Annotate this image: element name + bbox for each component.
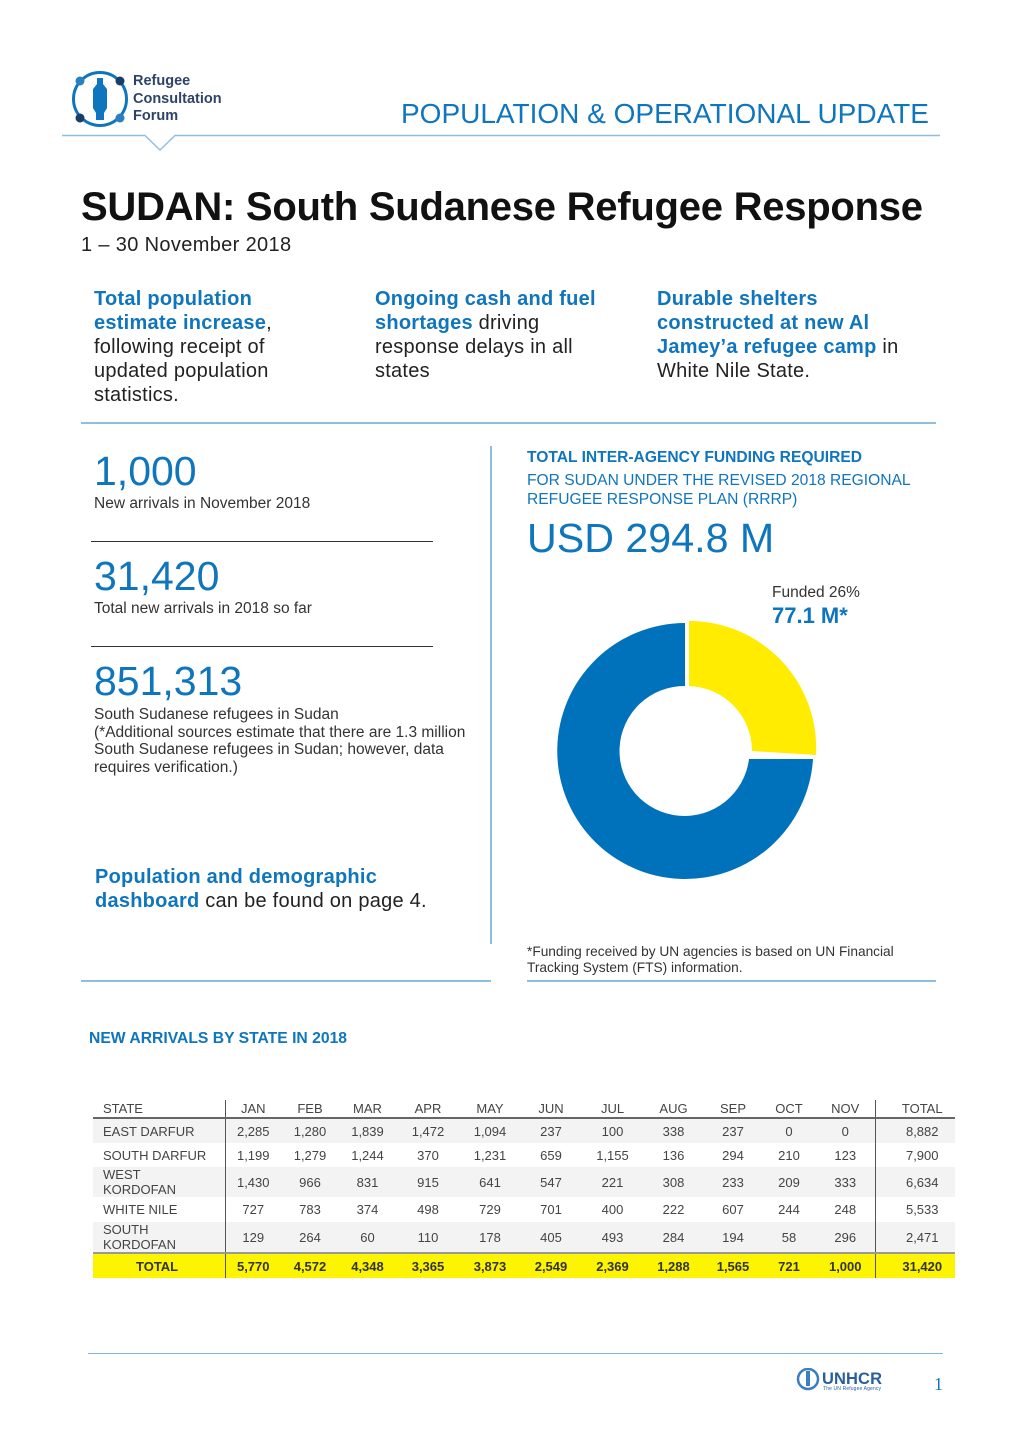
header title: POPULATION & OPERATIONAL UPDATE xyxy=(401,98,929,129)
table: new arrivals by state: 1,199 xyxy=(237,1148,270,1162)
table: new arrivals by state: 727 xyxy=(242,1202,264,1217)
table: new arrivals by state: MAY xyxy=(476,1101,504,1116)
table: new arrivals by state: 1,244 xyxy=(351,1148,384,1162)
table: new arrivals by state: 129 xyxy=(242,1230,264,1244)
funding heading xyxy=(527,449,911,508)
table: new arrivals by state: KORDOFAN xyxy=(103,1182,176,1197)
table: new arrivals by state: KORDOFAN xyxy=(103,1237,176,1252)
funding heading: REFUGEE RESPONSE PLAN (RRRP) xyxy=(527,491,797,508)
table: new arrivals by state: 3,873 xyxy=(474,1258,506,1274)
table: new arrivals by state: 2,549 xyxy=(535,1258,567,1274)
table: new arrivals by state: 2,471 xyxy=(906,1230,939,1244)
highlight 1 xyxy=(94,288,272,406)
table: new arrivals by state: 8,882 xyxy=(906,1124,939,1138)
table heading: NEW ARRIVALS BY STATE IN 2018 xyxy=(89,1030,347,1047)
table: new arrivals by state: SEP xyxy=(720,1101,746,1116)
table: new arrivals by state: 194 xyxy=(722,1230,744,1244)
highlight 1: estimate increase, xyxy=(94,312,272,334)
table: new arrivals by state: 0 xyxy=(842,1124,849,1138)
table: new arrivals by state: 1,279 xyxy=(294,1148,326,1162)
table: new arrivals by state: 221 xyxy=(602,1174,623,1190)
table: new arrivals by state: APR xyxy=(415,1101,441,1116)
UNHCR logo xyxy=(796,1368,882,1392)
table: new arrivals by state: 374 xyxy=(357,1202,378,1217)
table: new arrivals by state: 248 xyxy=(834,1202,856,1217)
table: new arrivals by state: 659 xyxy=(540,1148,562,1162)
highlight 1: following receipt of xyxy=(94,336,265,358)
funding footnote: Tracking System (FTS) information. xyxy=(527,960,742,975)
table: new arrivals by state: 264 xyxy=(299,1230,321,1244)
stat: new arrivals xyxy=(94,448,310,512)
table: new arrivals by state: 5,770 xyxy=(237,1258,270,1274)
dashboard note xyxy=(95,866,427,912)
table: new arrivals by state: 783 xyxy=(299,1202,321,1217)
highlight 2: shortages driving xyxy=(375,312,539,334)
stat: refugees in Sudan xyxy=(94,658,465,776)
highlight 1: statistics. xyxy=(94,384,179,406)
funded label xyxy=(772,584,860,628)
UNHCR logo: The UN Refugee Agency xyxy=(823,1386,882,1392)
footer rule xyxy=(88,1353,943,1354)
stat: refugees in Sudan: South Sudanese refugees in Sudan; however, data xyxy=(94,741,444,758)
table: new arrivals by state: 1,094 xyxy=(474,1124,506,1138)
table: new arrivals by state: 100 xyxy=(602,1124,623,1138)
highlight 2 xyxy=(375,288,596,382)
table: new arrivals by state: 405 xyxy=(540,1230,562,1244)
dashboard note: Population and demographic xyxy=(95,866,377,888)
table: new arrivals by state: 1,472 xyxy=(412,1124,444,1138)
highlight 2: states xyxy=(375,360,430,382)
funding footnote: *Funding received by UN agencies is based on UN Financial xyxy=(527,944,894,959)
funded slice xyxy=(689,621,816,755)
funding amount: USD 294.8 M xyxy=(527,515,774,561)
main title: SUDAN: South Sudanese Refugee Response xyxy=(81,185,923,229)
dashboard note: dashboard can be found on page 4. xyxy=(95,890,427,912)
table: new arrivals by state: 284 xyxy=(663,1230,684,1244)
table: new arrivals by state: 831 xyxy=(357,1174,378,1190)
funding heading: FOR SUDAN UNDER THE REVISED 2018 REGIONAL xyxy=(527,472,911,489)
table: new arrivals by state: 547 xyxy=(540,1174,562,1190)
table: new arrivals by state: JUN xyxy=(538,1101,564,1116)
table: new arrivals by state: 178 xyxy=(479,1230,501,1244)
table: new arrivals by state: AUG xyxy=(659,1101,688,1116)
highlight 3: constructed at new Al xyxy=(657,312,869,334)
funded label: 77.1 M* xyxy=(772,603,848,628)
UNHCR logo: UNHCR xyxy=(822,1370,882,1388)
table: new arrivals by state: 7,900 xyxy=(906,1148,939,1162)
table: new arrivals by state: 370 xyxy=(417,1148,439,1162)
table: new arrivals by state xyxy=(93,1100,955,1278)
table: new arrivals by state: MAR xyxy=(353,1101,382,1116)
table: new arrivals by state: TOTAL xyxy=(136,1258,178,1274)
bottom rules xyxy=(81,980,491,982)
funding heading: TOTAL INTER-AGENCY FUNDING REQUIRED xyxy=(527,449,862,466)
table: new arrivals by state: JUL xyxy=(601,1101,624,1116)
table: new arrivals by state: 2,285 xyxy=(237,1124,270,1138)
table: new arrivals by state: 5,533 xyxy=(906,1202,939,1217)
table: new arrivals by state: 1,000 xyxy=(829,1258,862,1274)
table: new arrivals by state: SOUTH xyxy=(103,1222,148,1237)
funding footnote xyxy=(527,944,894,975)
table: new arrivals by state: WEST xyxy=(103,1167,141,1182)
table: new arrivals by state: STATE xyxy=(103,1101,143,1116)
table: new arrivals by state: 110 xyxy=(418,1230,438,1244)
table: new arrivals by state: 1,565 xyxy=(717,1258,749,1274)
table: new arrivals by state: WHITE NILE xyxy=(103,1202,177,1217)
table: new arrivals by state: 222 xyxy=(663,1202,684,1217)
table: new arrivals by state: 0 xyxy=(785,1124,793,1138)
table: new arrivals by state: 3,365 xyxy=(412,1258,444,1274)
table: new arrivals by state: 60 xyxy=(360,1230,375,1244)
divider xyxy=(81,422,936,424)
table: new arrivals by state: 209 xyxy=(778,1174,800,1190)
table: new arrivals by state: 966 xyxy=(299,1174,321,1190)
table: new arrivals by state: 4,572 xyxy=(294,1258,326,1274)
table: new arrivals by state: 233 xyxy=(722,1174,744,1190)
page number: 1 xyxy=(934,1374,943,1394)
table: new arrivals by state: 498 xyxy=(417,1202,439,1217)
logo: Refugee Consultation Forum: Refugee xyxy=(133,73,190,89)
logo: Refugee Consultation Forum: Forum xyxy=(133,108,178,124)
date: 1 – 30 November 2018 xyxy=(81,234,291,256)
table: new arrivals by state: 210 xyxy=(778,1148,800,1162)
table: new arrivals by state: 721 xyxy=(778,1258,800,1274)
highlight 3: Jamey’a refugee camp in xyxy=(657,336,898,358)
table: new arrivals by state: 4,348 xyxy=(351,1258,384,1274)
highlight 1: updated population xyxy=(94,360,269,382)
stat: refugees in Sudan: (*Additional sources estimate that there are 1.3 million xyxy=(94,724,465,741)
table: new arrivals by state: 1,839 xyxy=(351,1124,384,1138)
highlight 3: Durable shelters xyxy=(657,288,818,310)
stat: new arrivals: 1,000 xyxy=(94,448,197,494)
table: new arrivals by state: 308 xyxy=(663,1174,684,1190)
highlight 3 xyxy=(657,288,898,382)
table: new arrivals by state: 641 xyxy=(479,1174,501,1190)
header rule with notch xyxy=(62,134,940,151)
logo: Refugee Consultation Forum: Consultation xyxy=(133,91,222,107)
highlight 3: White Nile State. xyxy=(657,360,810,382)
funded label: Funded 26% xyxy=(772,584,860,601)
table: new arrivals by state: 58 xyxy=(782,1230,796,1244)
table: new arrivals by state: 493 xyxy=(602,1230,623,1244)
table: new arrivals by state: FEB xyxy=(297,1101,323,1116)
table: new arrivals by state: 1,231 xyxy=(474,1148,506,1162)
table: new arrivals by state: 136 xyxy=(663,1148,684,1162)
stat: refugees in Sudan: 851,313 xyxy=(94,658,242,704)
table: new arrivals by state: EAST DARFUR xyxy=(103,1124,194,1138)
table: new arrivals by state: 333 xyxy=(834,1174,856,1190)
table: new arrivals by state: TOTAL xyxy=(902,1101,943,1116)
table: new arrivals by state: 1,155 xyxy=(596,1148,629,1162)
table: new arrivals by state: 2,369 xyxy=(596,1258,629,1274)
table: new arrivals by state: 296 xyxy=(834,1230,856,1244)
table: new arrivals by state: 1,430 xyxy=(237,1174,270,1190)
stat: total new arrivals: 31,420 xyxy=(94,553,219,599)
table: new arrivals by state: 338 xyxy=(663,1124,684,1138)
table: new arrivals by state: 244 xyxy=(778,1202,800,1217)
table: new arrivals by state: 237 xyxy=(722,1124,744,1138)
stat: new arrivals: New arrivals in November 2018 xyxy=(94,495,310,512)
table: new arrivals by state: 123 xyxy=(834,1148,856,1162)
table: new arrivals by state: 729 xyxy=(479,1202,501,1217)
vertical divider xyxy=(490,446,492,944)
table: new arrivals by state: NOV xyxy=(831,1101,859,1116)
stat: total new arrivals xyxy=(94,553,312,617)
table: new arrivals by state: 1,288 xyxy=(657,1258,690,1274)
donut chart xyxy=(557,621,816,879)
table: new arrivals by state: 915 xyxy=(417,1174,439,1190)
highlight 2: response delays in all xyxy=(375,336,573,358)
table: new arrivals by state: 400 xyxy=(602,1202,623,1217)
table: new arrivals by state: 1,280 xyxy=(294,1124,326,1138)
logo: Refugee Consultation Forum xyxy=(72,71,222,127)
table: new arrivals by state: 294 xyxy=(722,1148,744,1162)
table: new arrivals by state: 6,634 xyxy=(906,1174,939,1190)
stat: refugees in Sudan: requires verification.) xyxy=(94,759,238,776)
table: new arrivals by state: 701 xyxy=(540,1202,562,1217)
table: new arrivals by state: OCT xyxy=(775,1101,803,1116)
stat: total new arrivals: Total new arrivals in 2018 so far xyxy=(94,600,312,617)
table: new arrivals by state: 31,420 xyxy=(902,1258,942,1274)
highlight 2: Ongoing cash and fuel xyxy=(375,288,596,310)
unfunded slice xyxy=(557,623,813,879)
table: new arrivals by state: 607 xyxy=(722,1202,744,1217)
highlight 1: Total population xyxy=(94,288,252,310)
table: new arrivals by state: 237 xyxy=(540,1124,562,1138)
table: new arrivals by state: JAN xyxy=(241,1101,266,1116)
stat: refugees in Sudan: South Sudanese refugees in Sudan xyxy=(94,706,339,723)
table: new arrivals by state: SOUTH DARFUR xyxy=(103,1148,206,1162)
